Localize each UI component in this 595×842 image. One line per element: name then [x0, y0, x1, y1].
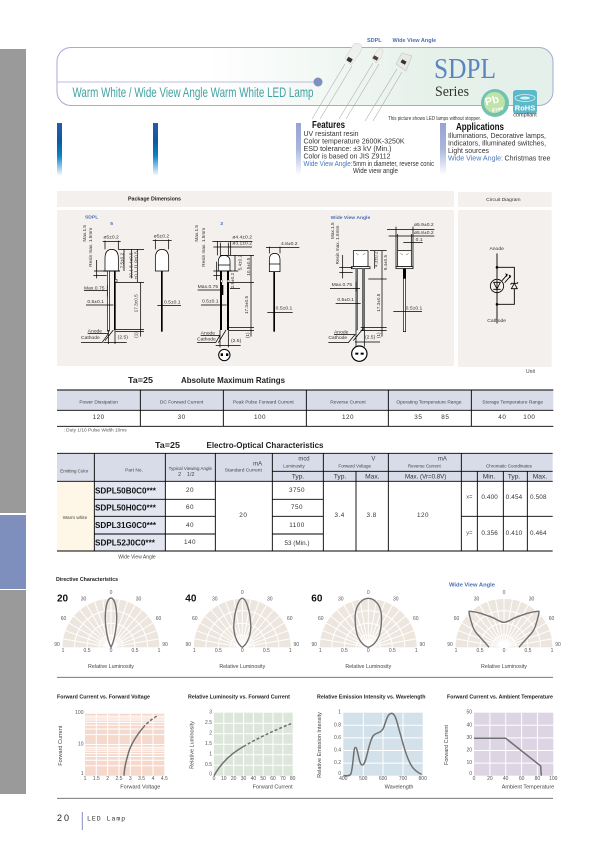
chart: relative luminosity vs forward current: 40	[251, 776, 256, 782]
drawing: SDPL 5mm lamp: ø5±0.2	[103, 234, 119, 240]
table: electro-optical characteristics: Luminosity	[283, 463, 305, 468]
drawing: SDPL 3mm lamp: Max.0.75	[198, 284, 218, 290]
table: electro-optical characteristics: Typ.	[334, 473, 346, 480]
series name	[434, 53, 496, 100]
heading: electro-optical characteristics: Ta=25	[155, 440, 180, 450]
polar chart: wide view angle: 60	[549, 616, 554, 622]
heading: absolute maximum ratings: Ta=25	[128, 375, 153, 385]
applications: Illuminations, Decorative lamps,	[448, 131, 546, 140]
chart: forward current vs forward voltage: 1.5	[93, 776, 100, 782]
drawing: wide view angle lamp: Max.0.75	[332, 282, 352, 288]
features: Features	[312, 120, 345, 131]
polar chart: 20 degrees	[54, 590, 168, 670]
drawing: SDPL 5mm lamp	[81, 215, 144, 344]
table: electro-optical characteristics: Standard Current	[225, 467, 263, 473]
chart: relative luminosity vs forward current: 70	[280, 776, 286, 782]
features: Color temperature 2600K-3250K	[304, 136, 405, 146]
drawing: wide view angle lamp side view: ø5.9±0.2	[414, 222, 434, 228]
chart: relative luminosity vs forward current: 20	[231, 776, 237, 782]
polar chart: wide view angle: 0.5	[477, 648, 484, 654]
chart: relative emission intensity vs wavelength	[317, 694, 427, 790]
chart: forward current vs ambient temperature: 20	[487, 776, 493, 782]
chart: forward current vs ambient temperature: 60	[519, 776, 525, 782]
table: electro-optical characteristics: 120	[417, 512, 429, 519]
chart: forward current vs ambient temperature: Forward Current vs. Ambient Temperature	[447, 694, 553, 700]
applications: Applications	[456, 122, 504, 133]
series name: SDPL	[434, 53, 496, 85]
drawing: wide view angle lamp side view: 0.1	[416, 237, 423, 243]
chart: relative luminosity vs forward current: 30	[241, 776, 246, 782]
features: ESD tolerance: ±3 kV (Min.)	[304, 144, 392, 153]
polar chart: 60 degrees: 1	[415, 648, 418, 654]
table: electro-optical characteristics: Chromatic Coordinates	[486, 463, 533, 468]
chart: forward current vs forward voltage: 100	[75, 710, 84, 716]
polar chart: 20 degrees: 0	[110, 648, 113, 654]
polar chart: wide view angle	[447, 582, 561, 670]
chart: relative luminosity vs forward current: 0	[209, 772, 212, 778]
features: Color is based on JIS Z9112	[304, 152, 390, 160]
drawing: SDPL 5mm lamp: Resin max. 1.5mm	[88, 228, 93, 267]
chart: relative luminosity vs forward current	[188, 694, 296, 790]
drawing: SDPL 3mm lamp: ø4.4±0.2	[232, 234, 252, 240]
accent bars	[57, 123, 446, 176]
chart: forward current vs forward voltage: 3.5	[138, 776, 145, 782]
chart: forward current vs forward voltage	[57, 694, 168, 790]
chart: relative luminosity vs forward current: 3	[209, 710, 212, 716]
drawing: SDPL 3mm lamp	[194, 221, 254, 361]
chart: forward current vs forward voltage: Forward Current	[58, 725, 64, 766]
drawing: SDPL 5mm lamp side view	[153, 233, 181, 332]
LED lamp photos	[312, 43, 412, 121]
chart: relative luminosity vs forward current: Forward Current	[253, 784, 293, 790]
table: absolute maximum ratings: 35	[414, 414, 422, 421]
lamp labels	[367, 38, 436, 44]
table: electro-optical characteristics: 3.4	[335, 512, 345, 519]
table: electro-optical characteristics: 60	[186, 504, 194, 511]
icon: Pb free	[481, 89, 509, 117]
drawing: SDPL 5mm lamp: 5	[110, 221, 113, 227]
chart: relative luminosity vs forward current: 50	[260, 776, 266, 782]
drawing: SDPL 5mm lamp: Max.1.5	[82, 225, 87, 242]
heading: electro-optical characteristics	[155, 440, 324, 450]
table: electro-optical characteristics: Warm white	[63, 515, 88, 520]
table: electro-optical characteristics: 1100	[289, 522, 305, 529]
table: electro-optical characteristics: 0.508	[530, 494, 547, 501]
chart: relative emission intensity vs wavelength: 0.4	[334, 748, 341, 754]
drawing: SDPL 3mm lamp side view	[266, 241, 299, 332]
polar chart: 40 degrees: 60	[192, 616, 198, 622]
chart: forward current vs ambient temperature: 20	[466, 748, 472, 754]
drawing: SDPL 3mm lamp: Resin max. 1.5mm	[201, 228, 206, 267]
drawing: SDPL 3mm lamp: ø3.1±0.2	[232, 241, 252, 247]
table: absolute maximum ratings: 120	[93, 414, 105, 421]
table: absolute maximum ratings: Operating Temperature Range	[396, 399, 462, 405]
drawing: wide view angle lamp: Resin max. 1.5mm	[335, 225, 340, 264]
chart: relative emission intensity vs wavelength: 0	[338, 771, 341, 777]
footnote: : Duty 1/10 Pulse Width 10ms	[64, 428, 127, 434]
chart: forward current vs ambient temperature: 0	[469, 771, 472, 777]
applications: Indicators, Illuminated switches,	[448, 138, 546, 148]
table: electro-optical characteristics: Reverse Current	[408, 463, 442, 468]
polar chart: wide view angle: 0.5	[525, 648, 532, 654]
polar chart: 20 degrees: 90	[162, 642, 168, 648]
chart: forward current vs forward voltage: 1	[84, 776, 87, 782]
polar chart: 40 degrees: 0	[241, 648, 244, 654]
drawing: SDPL 5mm lamp: 7.5±0.2	[119, 253, 124, 268]
page footer: LED Lamp	[87, 816, 126, 822]
table: absolute maximum ratings	[57, 390, 553, 426]
table: absolute maximum ratings: 120	[342, 414, 354, 421]
chart: relative emission intensity vs wavelength: 1	[338, 710, 341, 716]
chart: relative emission intensity vs wavelength: 700	[399, 776, 407, 782]
drawing: wide view angle lamp: 4.3±0.2	[373, 251, 378, 267]
drawing: SDPL 3mm lamp side view: 4.8±0.2	[281, 241, 298, 247]
chart: relative emission intensity vs wavelength: Wavelength	[385, 784, 413, 790]
polar chart: 60 degrees: 0.5	[341, 648, 348, 654]
drawing: wide view angle lamp: Anode	[334, 329, 349, 335]
table: electro-optical characteristics: mA	[253, 462, 262, 468]
panel: circuit diagram	[458, 192, 552, 367]
chart: forward current vs forward voltage: 10	[78, 741, 84, 747]
table: electro-optical characteristics: 0.454	[506, 494, 523, 501]
icon: Pb free: Pb	[484, 93, 501, 109]
polar chart: 60 degrees: 60	[311, 593, 323, 604]
table: electro-optical characteristics: 0.464	[530, 530, 547, 537]
table: absolute maximum ratings: 85	[441, 414, 449, 421]
header panel	[57, 48, 553, 106]
table: electro-optical characteristics: Min.	[483, 473, 495, 480]
polar chart: 60 degrees: 60	[318, 616, 324, 622]
table: electro-optical characteristics: Max.	[533, 473, 547, 480]
drawing: wide view angle lamp: Cathode	[328, 335, 347, 341]
chart: relative emission intensity vs wavelength: 0.2	[334, 760, 341, 766]
table: electro-optical characteristics: Emitting Color	[60, 468, 89, 473]
polar chart: wide view angle: 1	[455, 648, 458, 654]
drawing: wide view angle lamp: Max.1.5	[330, 222, 335, 239]
polar chart: wide view angle: 90	[555, 642, 561, 648]
chart: relative emission intensity vs wavelength: 500	[359, 776, 368, 782]
polar chart: 20 degrees: 1	[62, 648, 65, 654]
photo note: This picture shows LED lamps without stopper.	[388, 116, 481, 122]
polar chart: 60 degrees: 0.5	[389, 648, 396, 654]
polar chart: 60 degrees: 30	[393, 596, 399, 602]
drawing: wide view angle lamp	[328, 215, 388, 361]
drawing: SDPL 5mm lamp side view: 0.5±0.1	[164, 300, 181, 306]
polar chart: wide view angle: 30	[474, 596, 479, 602]
features: Wide view angle	[353, 166, 398, 175]
drawing: SDPL 5mm lamp side view: ø5±0.2	[154, 233, 169, 239]
drawing: SDPL 5mm lamp: (1)	[133, 332, 138, 338]
chart: relative luminosity vs forward current: 0.5	[205, 762, 212, 768]
table: electro-optical characteristics: 3.8	[367, 512, 377, 519]
chart: forward current vs ambient temperature: 10	[466, 760, 472, 766]
polar chart: 20 degrees: 60	[61, 616, 66, 622]
table: electro-optical characteristics: Max.	[365, 473, 380, 480]
drawing: SDPL 5mm lamp: Cathode	[81, 335, 100, 341]
table: absolute maximum ratings: 100	[254, 414, 266, 421]
polar chart: 40 degrees: 90	[186, 642, 191, 648]
chart: forward current vs ambient temperature: 100	[549, 776, 558, 782]
polar chart: wide view angle: 1	[551, 648, 554, 654]
heading: electro-optical characteristics: Electro-Optical Characteristics	[206, 440, 324, 450]
drawing: SDPL 5mm lamp: 20.1 8.4±0.5	[128, 252, 133, 278]
chart: relative emission intensity vs wavelength: 800	[419, 776, 427, 782]
chart: forward current vs ambient temperature: Ambient Temperature	[502, 784, 554, 790]
drawing: wide view angle lamp side view: ø5.8±0.2	[414, 230, 434, 236]
lamp labels: Wide View Angle	[392, 38, 436, 44]
drawing: SDPL 3mm lamp: 3	[220, 221, 223, 227]
table: electro-optical characteristics: 40	[186, 522, 194, 529]
table: electro-optical characteristics	[57, 453, 553, 551]
table: electro-optical characteristics: 0.356	[481, 530, 498, 537]
heading: absolute maximum ratings: Absolute Maximum Ratings	[181, 375, 285, 385]
drawing: wide view angle lamp: Wide View Angle	[331, 215, 370, 221]
drawing: SDPL 3mm lamp side view: 0.5±0.1	[276, 305, 292, 311]
chart: forward current vs ambient temperature: 50	[466, 710, 472, 716]
polar chart: 40 degrees	[185, 590, 299, 670]
table: electro-optical characteristics: mA	[438, 457, 447, 463]
chart: relative emission intensity vs wavelength: Relative Emission Intensity	[317, 712, 323, 778]
polar chart: 20 degrees: 0.5	[84, 648, 91, 654]
chart: relative luminosity vs forward current: 2	[209, 731, 212, 737]
page footer: 20	[57, 813, 71, 823]
table: absolute maximum ratings: 100	[523, 414, 535, 421]
heading: circuit diagram: Circuit Diagram	[486, 197, 521, 203]
polar chart: 40 degrees: 0.5	[263, 648, 270, 654]
features: 5mm in diameter, reverse conic	[353, 159, 434, 168]
table: absolute maximum ratings: DC Forward Current	[160, 399, 204, 405]
drawing: SDPL 3mm lamp: Cathode	[197, 337, 216, 343]
chart: forward current vs ambient temperature: 80	[535, 776, 540, 782]
table: electro-optical characteristics: SDPL50B0C0***	[95, 485, 157, 495]
table: electro-optical characteristics: y=	[466, 531, 473, 537]
drawing: SDPL 3mm lamp: (2.5)	[231, 338, 242, 344]
chart: forward current vs forward voltage: 4.5	[161, 776, 168, 782]
polar chart: 60 degrees: 60	[413, 616, 419, 622]
table: electro-optical characteristics: V	[371, 457, 375, 463]
chart: relative luminosity vs forward current: 60	[270, 776, 276, 782]
drawing: SDPL 3mm lamp: 17.3±0.5	[244, 296, 249, 314]
polar chart: 20 degrees: 60	[156, 616, 161, 622]
polar chart: 40 degrees: 60	[287, 616, 293, 622]
page footer	[57, 812, 126, 830]
icon: Pb free: Free	[492, 106, 504, 114]
schematic: Anode	[489, 246, 504, 252]
table: electro-optical characteristics: 0.400	[481, 494, 498, 501]
polar chart: 60 degrees: 0	[367, 648, 370, 654]
chart: relative emission intensity vs wavelength: 0.6	[334, 735, 341, 741]
polar chart: 20 degrees: 20	[57, 593, 69, 604]
drawing: SDPL 5mm lamp: ±0.1 11.9±0.5	[133, 251, 138, 279]
chart: forward current vs forward voltage: 2	[106, 776, 109, 782]
polar chart: 20 degrees: 0	[110, 590, 113, 596]
polar chart: 20 degrees: 30	[136, 596, 141, 602]
table: electro-optical characteristics: 750	[291, 504, 303, 511]
polar chart: 60 degrees: 1	[319, 648, 322, 654]
polar chart: 60 degrees: 90	[420, 642, 425, 648]
drawing: SDPL 5mm lamp: (2.5)	[118, 335, 128, 341]
polar chart: wide view angle: Wide View Angle	[449, 582, 495, 588]
series name: Series	[435, 84, 469, 100]
chart: relative luminosity vs forward current: 2.5	[205, 720, 212, 726]
table: electro-optical characteristics: 20	[186, 487, 194, 494]
chart: forward current vs ambient temperature: 30	[466, 735, 472, 741]
table: electro-optical characteristics: 53 (Min.)	[285, 540, 309, 547]
heading: absolute maximum ratings	[128, 375, 285, 385]
chart: relative luminosity vs forward current: Relative Luminosity	[190, 721, 196, 769]
features: Wide View Angle:	[304, 159, 352, 168]
drawing: SDPL 3mm lamp: 0.5±0.1	[202, 299, 219, 305]
table: electro-optical characteristics: mcd	[298, 457, 310, 463]
drawing: SDPL 3mm lamp: 2.8±0.2	[230, 273, 235, 288]
polar chart: 40 degrees: Relative Luminosity	[219, 664, 266, 670]
sidebar	[0, 49, 26, 794]
polar chart: 40 degrees: 40	[185, 593, 197, 604]
chart: relative emission intensity vs wavelength: 0.8	[334, 722, 341, 728]
table: electro-optical characteristics: Typ.	[292, 473, 304, 480]
chart: relative luminosity vs forward current: 80	[290, 776, 296, 782]
applications: Light sources	[448, 146, 489, 155]
polar chart: 40 degrees: 0	[241, 590, 244, 596]
chart: forward current vs ambient temperature	[444, 694, 558, 790]
polar chart: 20 degrees: 30	[81, 596, 86, 602]
features	[304, 120, 434, 175]
table: electro-optical characteristics: x=	[466, 495, 473, 501]
polar chart: 20 degrees: 0.5	[132, 648, 139, 654]
features: UV resistant resin	[304, 129, 358, 138]
polar chart: 40 degrees: 30	[267, 596, 273, 602]
table: electro-optical characteristics: 140	[184, 539, 196, 546]
chart: forward current vs forward voltage: 3	[129, 776, 132, 782]
lamp labels: SDPL	[367, 38, 382, 44]
drawing: SDPL 5mm lamp: Anode	[88, 328, 102, 334]
polar chart: wide view angle: 0	[503, 590, 506, 596]
table: electro-optical characteristics: Max. (Vr=0.8V)	[405, 473, 446, 480]
table: absolute maximum ratings: 40	[498, 414, 506, 421]
applications	[448, 122, 550, 162]
polar chart: wide view angle: 60	[454, 616, 459, 622]
polar chart: 40 degrees: 90	[294, 642, 299, 648]
chart: relative luminosity vs forward current: 10	[221, 776, 227, 782]
drawing: wide view angle lamp: 0.5±0.1	[337, 297, 354, 303]
drawing: SDPL 5mm lamp: SDPL	[85, 215, 98, 221]
polar chart: wide view angle: 30	[529, 596, 534, 602]
table: electro-optical characteristics: SDPL31G0C0***	[95, 520, 157, 530]
applications: Christmas tree	[504, 154, 550, 162]
drawing: SDPL 3mm lamp: 5.4±0.2	[237, 255, 242, 270]
polar chart: 40 degrees: 0.5	[215, 648, 222, 654]
polar chart: 60 degrees: 90	[312, 642, 317, 648]
table: absolute maximum ratings: Power Dissipation	[79, 399, 118, 405]
applications: Wide View Angle:	[448, 154, 503, 162]
chart: relative luminosity vs forward current: Relative Luminosity vs. Forward Current	[188, 694, 290, 700]
chart: forward current vs ambient temperature: 40	[503, 776, 509, 782]
drawing: wide view angle lamp: 9.4±0.5	[383, 255, 388, 270]
table note: wide view angle: Wide View Angle	[118, 554, 156, 560]
table: electro-optical characteristics: Part No.	[125, 467, 143, 473]
polar chart: wide view angle: 0	[503, 648, 506, 654]
chart: forward current vs forward voltage: Forward Voltage	[120, 784, 160, 790]
icon: RoHS: RoHS	[515, 104, 535, 112]
chart: forward current vs forward voltage: Forward Current vs. Forward Voltage	[57, 694, 150, 700]
drawing: wide view angle lamp: (2.5)	[365, 335, 376, 341]
drawing: wide view angle lamp side view: 0.5±0.1	[406, 305, 422, 311]
table: absolute maximum ratings: 30	[178, 414, 186, 421]
polar chart: wide view angle: 90	[447, 642, 453, 648]
polar chart: 60 degrees: 30	[338, 596, 344, 602]
heading: directive characteristics: Directive Characteristics	[56, 577, 118, 583]
table: electro-optical characteristics: Typ.	[508, 473, 520, 480]
drawing: SDPL 5mm lamp: Max.0.75	[84, 286, 105, 292]
icon: RoHS	[513, 90, 537, 118]
table: electro-optical characteristics: 3750	[289, 487, 305, 494]
polar chart: 20 degrees: 1	[158, 648, 161, 654]
chart: relative luminosity vs forward current: 1	[209, 752, 212, 758]
table: absolute maximum ratings: Storage Temperature Range	[482, 399, 543, 405]
table: absolute maximum ratings: Reverse Current	[330, 399, 366, 405]
chart: forward current vs ambient temperature: Forward Current	[444, 725, 450, 765]
chart: relative emission intensity vs wavelength: 600	[379, 776, 387, 782]
schematic	[487, 246, 518, 324]
table: electro-optical characteristics: Typical Viewing Angle	[169, 466, 212, 471]
chart: forward current vs forward voltage: 2.5	[116, 776, 123, 782]
chart: forward current vs ambient temperature: 40	[466, 722, 472, 728]
drawing: wide view angle lamp side view	[387, 222, 434, 332]
polar chart: 60 degrees: 0	[367, 590, 370, 596]
table: electro-optical characteristics: Forward Voltage	[338, 463, 371, 468]
drawing: wide view angle lamp: 17.3±0.5	[376, 293, 381, 312]
drawing: SDPL 3mm lamp: Anode	[201, 330, 215, 336]
title: Warm White / Wide View Angle Warm White LED Lamp	[72, 84, 314, 100]
table: electro-optical characteristics: SDPL50H0C0***	[95, 502, 157, 512]
drawing: SDPL 3mm lamp: 10.5±0.5	[246, 257, 251, 276]
chart: forward current vs ambient temperature: 0	[473, 776, 476, 782]
table: electro-optical characteristics: 0.410	[506, 530, 523, 537]
polar chart: 40 degrees: 30	[212, 596, 218, 602]
chart: forward current vs forward voltage: 4	[152, 776, 155, 782]
table: absolute maximum ratings: Peak Pulse Forward Current	[233, 399, 294, 405]
unit note: Unit	[526, 369, 536, 375]
chart: forward current vs forward voltage: 1	[81, 771, 84, 777]
drawing: SDPL 5mm lamp: 0.5±0.1	[87, 299, 104, 305]
polar chart: 60 degrees	[311, 590, 425, 670]
drawing: wide view angle lamp: (1)	[376, 332, 381, 338]
chart: relative emission intensity vs wavelength: 400	[339, 776, 348, 782]
table: electro-optical characteristics: SDPL52J0C0***	[95, 537, 156, 547]
drawing: SDPL 3mm lamp: (1)	[245, 332, 250, 338]
table: electro-optical characteristics: 2 1/2	[178, 472, 195, 478]
polar chart: wide view angle: Relative Luminosity	[481, 664, 527, 670]
drawing: SDPL 5mm lamp: 17.3±0.5	[133, 294, 138, 312]
schematic: Cathode	[487, 318, 506, 324]
drawing: SDPL 3mm lamp: Max.1.5	[194, 225, 199, 242]
chart: relative luminosity vs forward current: 0	[213, 776, 216, 782]
panel: package dimensions	[57, 191, 454, 366]
polar chart: 40 degrees: 1	[193, 648, 196, 654]
polar chart: 60 degrees: Relative Luminosity	[345, 664, 392, 670]
heading: package dimensions: Package Dimensions	[128, 196, 181, 202]
chart: relative emission intensity vs wavelength: Relative Emission Intensity vs. Wavelength	[317, 694, 425, 700]
polar chart: 40 degrees: 1	[289, 648, 292, 654]
icon: RoHS: compliant	[513, 112, 537, 118]
chart: relative luminosity vs forward current: 1.5	[205, 741, 212, 747]
polar chart: 20 degrees: 90	[54, 642, 60, 648]
polar chart: 20 degrees: Relative Luminosity	[88, 664, 134, 670]
table: electro-optical characteristics: 20	[239, 512, 247, 519]
